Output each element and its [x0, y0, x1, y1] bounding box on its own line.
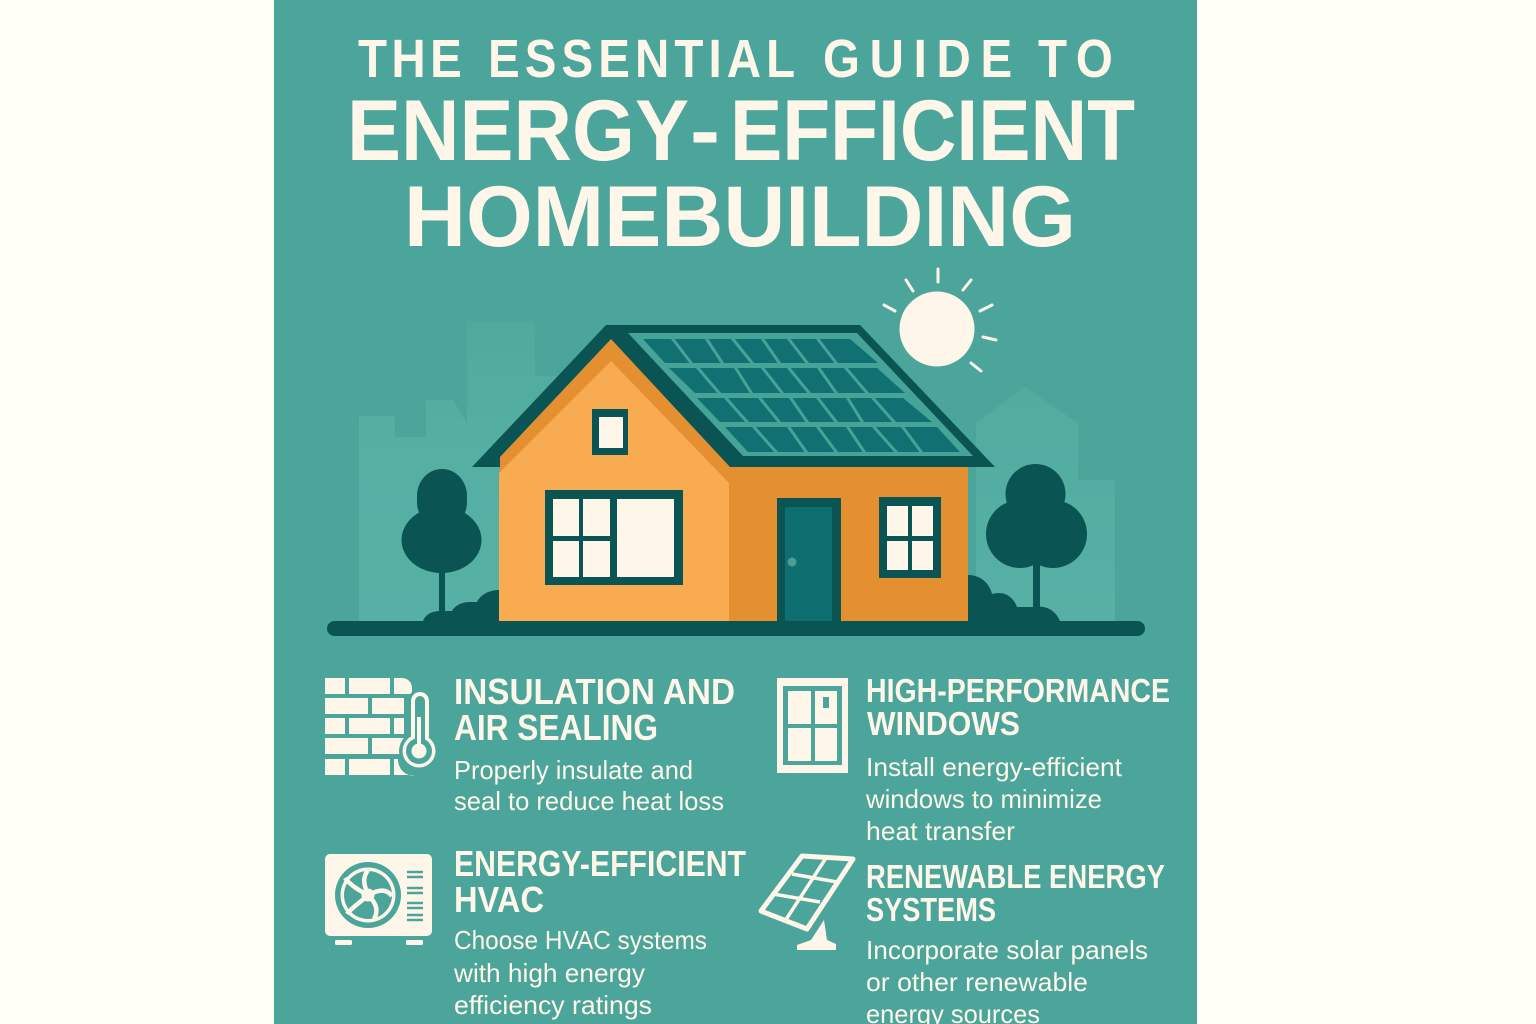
gable trim: [500, 339, 730, 483]
insulation body text: seal to reduce heat loss: [454, 786, 724, 816]
title line 2: ENERGY: [347, 83, 689, 179]
left tree: [402, 469, 482, 621]
background skyline right: [976, 387, 1115, 621]
right bushes: [968, 575, 1060, 621]
title line 2: EFFICIENT: [730, 83, 1135, 179]
heading: high-performance windows: WINDOWS: [867, 705, 1020, 742]
windows body text: Install energy-efficient: [866, 752, 1123, 782]
icon: window: [777, 678, 848, 773]
right tree: [986, 464, 1087, 621]
title line 1: ESSENTIAL: [488, 28, 795, 89]
windows body text: windows to minimize: [865, 784, 1102, 814]
teal background panel: [274, 0, 1197, 1024]
title line 3: HOMEBUILDING: [404, 169, 1076, 265]
house illustration: [327, 269, 1145, 636]
heading: high-performance windows: [866, 672, 1170, 742]
heading: insulation: INSULATION AND: [454, 671, 735, 712]
title line 2: -: [690, 83, 720, 179]
background skyline left: [359, 321, 557, 621]
icon: HVAC unit: [325, 854, 432, 945]
insulation body text: [454, 755, 724, 816]
title: [347, 28, 1135, 265]
renewable body text: [866, 935, 1148, 1024]
large window: [545, 490, 683, 585]
HVAC body text: with high energy: [453, 958, 645, 988]
heading: renewable energy systems: [866, 858, 1165, 928]
heading: energy-efficient HVAC: ENERGY-EFFICIENT: [454, 843, 746, 884]
heading: air sealing: AIR SEALING: [454, 707, 658, 748]
title line 1: THE: [358, 28, 462, 89]
heading: renewable energy systems: RENEWABLE ENERGY: [866, 858, 1165, 895]
small window: [879, 497, 941, 578]
HVAC body text: [453, 925, 707, 1020]
renewable body text: or other renewable: [866, 967, 1088, 997]
icon: solar panel: [761, 856, 853, 950]
sun: [884, 269, 996, 371]
HVAC body text: Choose HVAC systems: [454, 925, 707, 955]
heading: renewable energy systems: SYSTEMS: [866, 891, 996, 928]
left bushes: [423, 590, 499, 621]
roof: [472, 325, 995, 467]
renewable body text: Incorporate solar panels: [866, 935, 1148, 965]
attic window: [592, 409, 628, 455]
heading: energy-efficient HVAC: [454, 843, 746, 920]
heading: high-performance windows: HIGH-PERFORMANCE: [866, 672, 1170, 709]
door: [777, 498, 841, 621]
solar panel array: [628, 333, 973, 456]
title line 1: [358, 28, 1113, 89]
HVAC body text: efficiency ratings: [454, 990, 652, 1020]
windows body text: [865, 752, 1123, 846]
windows body text: heat transfer: [866, 816, 1015, 846]
title line 1: TO: [1038, 28, 1113, 89]
ground bar: [327, 621, 1145, 636]
title line 2: [347, 83, 1135, 179]
gable wall: [499, 361, 729, 621]
right wall: [729, 467, 968, 621]
title line 1: GUIDE: [823, 28, 1012, 89]
icon: brick wall with thermometer: [325, 678, 439, 775]
insulation body text: Properly insulate and: [454, 755, 693, 785]
heading: energy-efficient HVAC: HVAC: [454, 879, 544, 920]
